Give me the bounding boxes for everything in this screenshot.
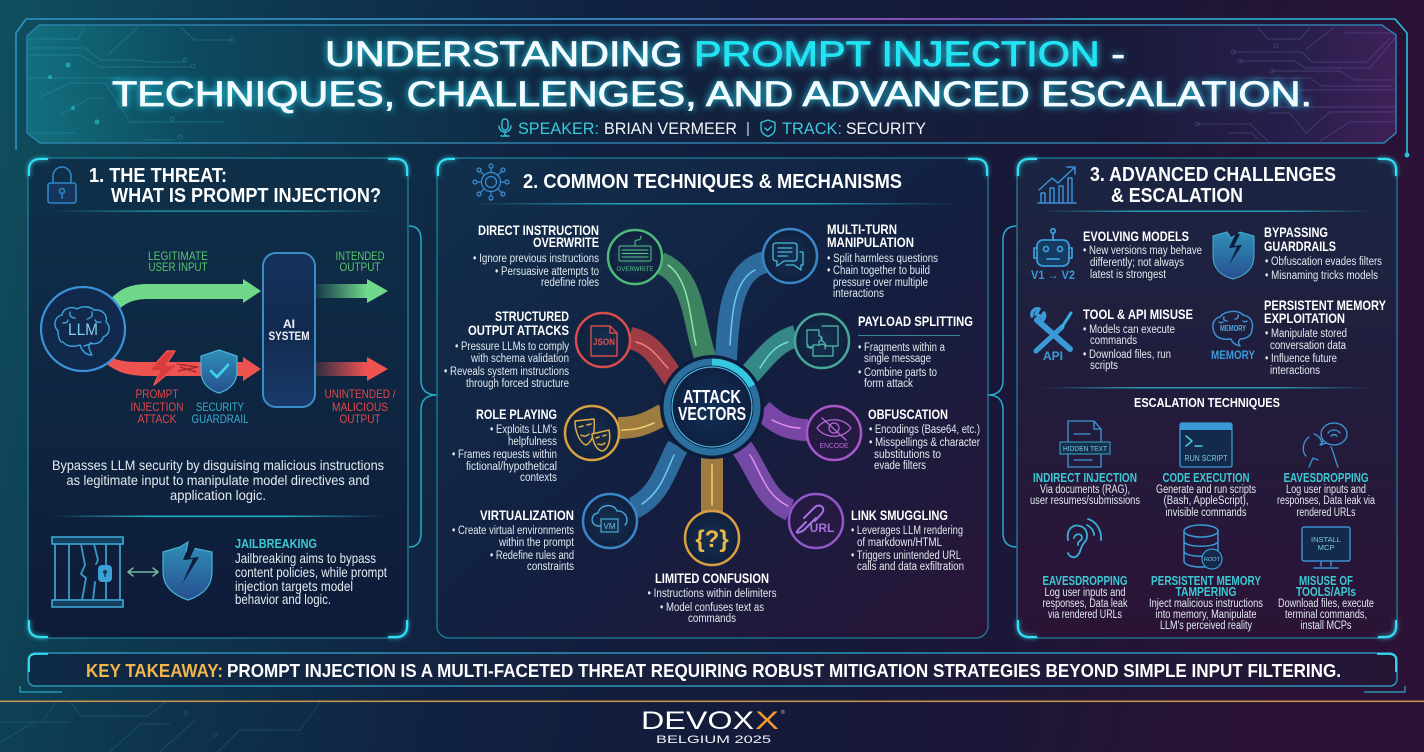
- speaker and track line: SECURITY: [846, 119, 926, 138]
- text: structured output attacks: through forced structure: [466, 378, 569, 390]
- title: UNDERSTANDING PROMPT INJECTION -: [325, 35, 1125, 74]
- item: evolving models: differently; not always: [1090, 257, 1184, 269]
- item: bypassing guardrails: BYPASSING: [1264, 224, 1328, 240]
- text: structured output attacks: OUTPUT ATTACKS: [468, 322, 569, 338]
- speaker and track line: [499, 119, 926, 138]
- icon: rising chart: [1038, 167, 1076, 203]
- item: evolving models: EVOLVING MODELS: [1083, 228, 1189, 244]
- flow labels: OUTPUT: [340, 260, 381, 274]
- text: direct instruction overwrite: [473, 222, 599, 289]
- text: multi-turn manipulation: MANIPULATION: [827, 234, 914, 250]
- escalation: eavesdropping listener: Log user inputs and: [1286, 484, 1366, 496]
- node: payload puzzle: [795, 314, 849, 368]
- icon: security shield: [201, 350, 237, 393]
- node: direct instruction overwrite: [608, 230, 662, 284]
- node: direct instruction overwrite: OVERWRITE: [616, 266, 654, 273]
- item: bypassing guardrails: [1213, 224, 1382, 282]
- escalation: code execution: invisible commands: [1166, 507, 1247, 519]
- text: obfuscation: substitutions to: [874, 449, 941, 461]
- AI system box: [263, 253, 315, 407]
- text: role playing: helpfulness: [508, 436, 557, 448]
- escalation: misuse of tools: TOOLS/APIs: [1296, 584, 1356, 599]
- node: structured output: [576, 313, 630, 367]
- escalation: indirect injection: HIDDEN TEXT: [1063, 446, 1108, 453]
- escalation: misuse of tools: terminal commands,: [1285, 609, 1367, 621]
- escalation: code execution: [1156, 423, 1256, 519]
- escalation: misuse of tools: INSTALL: [1311, 535, 1341, 544]
- flow labels: PROMPT: [136, 387, 179, 401]
- heading: [89, 164, 381, 207]
- escalation: code execution: Generate and run scripts: [1156, 484, 1256, 496]
- arrow: malicious output: [316, 357, 388, 381]
- flow labels: ATTACK: [138, 412, 176, 426]
- footer logo: BELGIUM 2025: [656, 734, 771, 746]
- item: tool and api misuse: API: [1043, 349, 1063, 363]
- item: evolving models: [1031, 228, 1202, 282]
- item: bypassing guardrails: GUARDRAILS: [1264, 238, 1336, 254]
- text: payload splitting: [858, 313, 973, 390]
- title: [112, 35, 1312, 114]
- escalation: memory tampering database: Inject malicious instructions: [1149, 598, 1263, 610]
- text: obfuscation: • Misspellings & character: [869, 437, 980, 449]
- escalation: memory tampering database: into memory, Manipulate: [1156, 609, 1256, 621]
- text: structured output attacks: • Pressure LLMs to comply: [455, 341, 569, 353]
- escalation: eavesdropping ear: [1042, 519, 1128, 621]
- text: link smuggling: of markdown/HTML: [857, 537, 943, 549]
- panel 1: the threat: [28, 158, 408, 638]
- escalation: indirect injection: INDIRECT INJECTION: [1033, 470, 1137, 485]
- text: multi-turn manipulation: interactions: [833, 288, 884, 300]
- icon: padlock: [48, 167, 76, 203]
- item: tool and api misuse: TOOL & API MISUSE: [1083, 306, 1193, 322]
- text: multi-turn manipulation: [827, 221, 938, 300]
- text: direct instruction overwrite: OVERWRITE: [533, 234, 599, 250]
- escalation: memory tampering database: PERSISTENT MEMORY: [1151, 573, 1261, 588]
- text: payload splitting: • Combine parts to: [858, 367, 937, 379]
- text: obfuscation: [868, 406, 980, 472]
- text: multi-turn manipulation: pressure over multiple: [833, 277, 928, 289]
- item: tool and api misuse: • Models can execute: [1083, 324, 1175, 336]
- jailbreaking text: [235, 536, 387, 607]
- node: virtualization: VM: [604, 522, 616, 531]
- text: limited confusion: • Model confuses text as: [660, 602, 764, 614]
- escalation: eavesdropping listener: EAVESDROPPING: [1284, 470, 1368, 485]
- item: tool and api misuse: commands: [1090, 335, 1137, 347]
- description text: Bypasses LLM security by disguising malicious instructions: [52, 457, 384, 473]
- node: obfuscation eye: [807, 406, 861, 460]
- escalation: eavesdropping listener: rendered URLs: [1296, 507, 1356, 519]
- flow labels: SECURITY: [196, 400, 244, 414]
- node: obfuscation eye: ENCODE: [820, 441, 848, 450]
- hub: attack vectors: [660, 355, 764, 459]
- text: virtualization: within the prompt: [498, 537, 575, 549]
- text: role playing: [452, 406, 557, 484]
- text: link smuggling: • Triggers unintended URL: [851, 550, 961, 562]
- heading: 1. THE THREAT:: [89, 164, 227, 187]
- item: persistent memory exploitation: [1211, 297, 1387, 377]
- escalation: eavesdropping listener: responses, Data leak via: [1277, 495, 1375, 507]
- text: limited confusion: commands: [688, 613, 736, 625]
- footer logo: X: [755, 707, 779, 735]
- escalation: indirect injection: Via documents (RAG),: [1040, 484, 1130, 496]
- text: role playing: • Frames requests within: [452, 449, 557, 461]
- text: virtualization: • Create virtual environments: [452, 525, 574, 537]
- flow labels: [130, 249, 396, 426]
- footer logo: ®: [781, 709, 785, 716]
- text: virtualization: [452, 507, 575, 573]
- text: multi-turn manipulation: MULTI-TURN: [827, 221, 897, 237]
- text: limited confusion: [648, 570, 777, 625]
- item: persistent memory exploitation: MEMORY: [1220, 324, 1246, 333]
- AI system box: SYSTEM: [268, 329, 310, 343]
- item: tool and api misuse: • Download files, run: [1083, 349, 1171, 361]
- escalation: memory tampering database: TAMPERING: [1176, 584, 1236, 599]
- text: link smuggling: • Leverages LLM rendering: [851, 525, 963, 537]
- text: link smuggling: calls and data exfiltration: [857, 561, 964, 573]
- node: link smuggling: URL: [810, 521, 834, 535]
- text: role playing: contexts: [520, 472, 557, 484]
- text: obfuscation: • Encodings (Base64, etc.): [869, 424, 980, 436]
- flow labels: MALICIOUS: [332, 400, 388, 414]
- item: persistent memory exploitation: conversation data: [1270, 340, 1346, 352]
- text: payload splitting: single message: [864, 353, 931, 365]
- escalation: code execution: (Bash, AppleScript),: [1164, 495, 1248, 507]
- panel connectors: [409, 226, 1017, 547]
- heading: WHAT IS PROMPT INJECTION?: [111, 184, 381, 207]
- escalation: memory tampering database: ROOT: [1204, 557, 1221, 563]
- text: virtualization: constraints: [527, 561, 574, 573]
- text: payload splitting: • Fragments within a: [858, 342, 945, 354]
- text: direct instruction overwrite: redefine roles: [541, 277, 599, 289]
- heading: 2. COMMON TECHNIQUES & MECHANISMS: [523, 170, 902, 193]
- item: persistent memory exploitation: • Influence future: [1265, 353, 1337, 365]
- text: virtualization: VIRTUALIZATION: [480, 507, 574, 523]
- text: direct instruction overwrite: DIRECT INSTRUCTION: [478, 222, 599, 238]
- text: payload splitting: form attack: [864, 378, 913, 390]
- jailbreaking text: injection targets model: [235, 578, 353, 594]
- footer logo: [641, 707, 785, 746]
- escalation heading: ESCALATION TECHNIQUES: [1134, 395, 1280, 410]
- footer divider: [0, 700, 1424, 702]
- icon: LLM brain: [41, 287, 125, 371]
- header banner: [16, 19, 1410, 158]
- text: structured output attacks: • Reveals system instructions: [444, 366, 569, 378]
- escalation: code execution: RUN SCRIPT: [1184, 454, 1228, 463]
- AI system box: AI: [283, 317, 295, 331]
- flow labels: USER INPUT: [148, 260, 208, 274]
- item: bypassing guardrails: • Obfuscation evades filters: [1265, 256, 1382, 268]
- escalation: misuse of tools: [1278, 527, 1374, 632]
- jailbreaking text: JAILBREAKING: [235, 536, 317, 551]
- flow labels: OUTPUT: [340, 412, 381, 426]
- item: evolving models: • New versions may behave: [1083, 245, 1202, 257]
- text: direct instruction overwrite: • Ignore previous instructions: [473, 253, 599, 265]
- text: direct instruction overwrite: • Persuasive attempts to: [495, 266, 599, 278]
- flow labels: GUARDRAIL: [192, 412, 249, 426]
- footer logo: DEVOX: [641, 707, 754, 735]
- escalation: eavesdropping ear: EAVESDROPPING: [1042, 573, 1128, 588]
- escalation: memory tampering database: LLM's perceived reality: [1160, 620, 1252, 632]
- node: multi-turn chat: [763, 229, 817, 283]
- item: persistent memory exploitation: interactions: [1270, 365, 1320, 377]
- escalation: misuse of tools: MISUSE OF: [1299, 573, 1353, 588]
- connectors to hub: [618, 262, 808, 512]
- item: evolving models: latest is strongest: [1090, 269, 1167, 281]
- heading: & ESCALATION: [1111, 184, 1243, 207]
- text: role playing: ROLE PLAYING: [476, 406, 557, 422]
- text: payload splitting: PAYLOAD SPLITTING: [858, 313, 973, 329]
- text: link smuggling: LINK SMUGGLING: [851, 507, 948, 523]
- arrow: legitimate input: [108, 279, 261, 312]
- arrow: injection attack: [104, 355, 261, 381]
- arrow: intended output: [316, 279, 388, 303]
- arrow: double headed: [128, 568, 158, 576]
- speaker and track line: |: [746, 120, 750, 137]
- text: structured output attacks: with schema validation: [470, 353, 569, 365]
- escalation: eavesdropping ear: responses, Data leak: [1042, 598, 1128, 610]
- hub: attack vectors: VECTORS: [678, 404, 746, 424]
- escalation: memory tampering database: [1149, 525, 1263, 632]
- text: multi-turn manipulation: • Chain together to build: [827, 265, 930, 277]
- speaker and track line: TRACK:: [782, 119, 842, 138]
- diagram: prompt injection flow: [41, 249, 396, 426]
- text: obfuscation: OBFUSCATION: [868, 406, 948, 422]
- description text: application logic.: [170, 487, 266, 503]
- node: virtualization: [583, 494, 637, 548]
- flow labels: UNINTENDED /: [324, 387, 396, 401]
- key takeaway banner: PROMPT INJECTION IS A MULTI-FACETED THREAT REQUIRING ROBUST MITIGATION STRATEGIES BEYOND SIMPLE INPUT FILTERING.: [227, 661, 1341, 681]
- flow labels: INJECTION: [130, 400, 184, 414]
- escalation: eavesdropping ear: Log user inputs and: [1044, 587, 1126, 599]
- key takeaway banner: KEY TAKEAWAY:: [86, 661, 223, 681]
- escalation: misuse of tools: Download files, execute: [1278, 598, 1374, 610]
- text: multi-turn manipulation: • Split harmless questions: [827, 253, 938, 265]
- item: persistent memory exploitation: • Manipulate stored: [1265, 328, 1347, 340]
- panel 2: common techniques: [437, 158, 988, 638]
- item: tool and api misuse: [1032, 306, 1193, 372]
- flow labels: LEGITIMATE: [148, 249, 208, 263]
- jailbreaking text: behavior and logic.: [235, 591, 331, 607]
- node: limited confusion: [685, 511, 739, 565]
- text: obfuscation: evade filters: [874, 460, 926, 472]
- icon: lightning bolt: [149, 351, 178, 385]
- node: structured output: JSON: [593, 337, 615, 348]
- hub: attack vectors: ATTACK: [683, 387, 741, 407]
- text: role playing: fictional/hypothetical: [466, 461, 557, 473]
- text: link smuggling: [851, 507, 964, 573]
- description text: as legitimate input to manipulate model directives and: [66, 472, 370, 488]
- heading: [1090, 163, 1336, 207]
- node: role playing masks: [565, 406, 619, 460]
- item: persistent memory exploitation: PERSISTENT MEMORY: [1264, 297, 1387, 313]
- escalation: indirect injection: user resumes/submissions: [1030, 495, 1140, 507]
- node: limited confusion: {?}: [695, 526, 729, 553]
- item: persistent memory exploitation: EXPLOITATION: [1264, 310, 1345, 326]
- text: role playing: • Exploits LLM's: [490, 424, 557, 436]
- text: limited confusion: • Instructions within delimiters: [648, 588, 777, 600]
- icon: network: [473, 164, 509, 200]
- title: TECHNIQUES, CHALLENGES, AND ADVANCED ESCALATION.: [112, 75, 1312, 114]
- text: virtualization: • Redefine rules and: [490, 550, 574, 562]
- item: evolving models: V1 → V2: [1031, 268, 1075, 282]
- escalation: eavesdropping listener: [1277, 423, 1375, 519]
- heading: 3. ADVANCED CHALLENGES: [1090, 163, 1336, 186]
- key takeaway banner: [20, 653, 1405, 692]
- speaker and track line: SPEAKER:: [518, 119, 599, 138]
- speaker and track line: BRIAN VERMEER: [604, 119, 737, 138]
- node: link smuggling: [789, 494, 843, 548]
- jailbreaking text: Jailbreaking aims to bypass: [235, 550, 376, 566]
- escalation: eavesdropping ear: via rendered URLs: [1048, 609, 1122, 621]
- escalation: misuse of tools: MCP: [1318, 543, 1334, 552]
- escalation: indirect injection: [1030, 421, 1140, 507]
- icon: LLM brain: LLM: [68, 320, 98, 339]
- jailbreaking text: content policies, while prompt: [235, 564, 387, 580]
- text: structured output attacks: STRUCTURED: [495, 308, 569, 324]
- icon: broken jail: [52, 537, 123, 607]
- description text: [52, 457, 384, 503]
- text: limited confusion: LIMITED CONFUSION: [655, 570, 769, 586]
- escalation: code execution: CODE EXECUTION: [1162, 470, 1250, 485]
- item: persistent memory exploitation: MEMORY: [1211, 348, 1255, 362]
- text: structured output attacks: [444, 308, 569, 390]
- item: bypassing guardrails: • Misnaming tricks models: [1265, 270, 1378, 282]
- item: tool and api misuse: scripts: [1090, 360, 1118, 372]
- flow labels: INTENDED: [336, 249, 385, 263]
- escalation: misuse of tools: install MCPs: [1300, 620, 1352, 632]
- icon: broken shield: [163, 542, 212, 600]
- panel 3: advanced challenges: [1017, 158, 1397, 638]
